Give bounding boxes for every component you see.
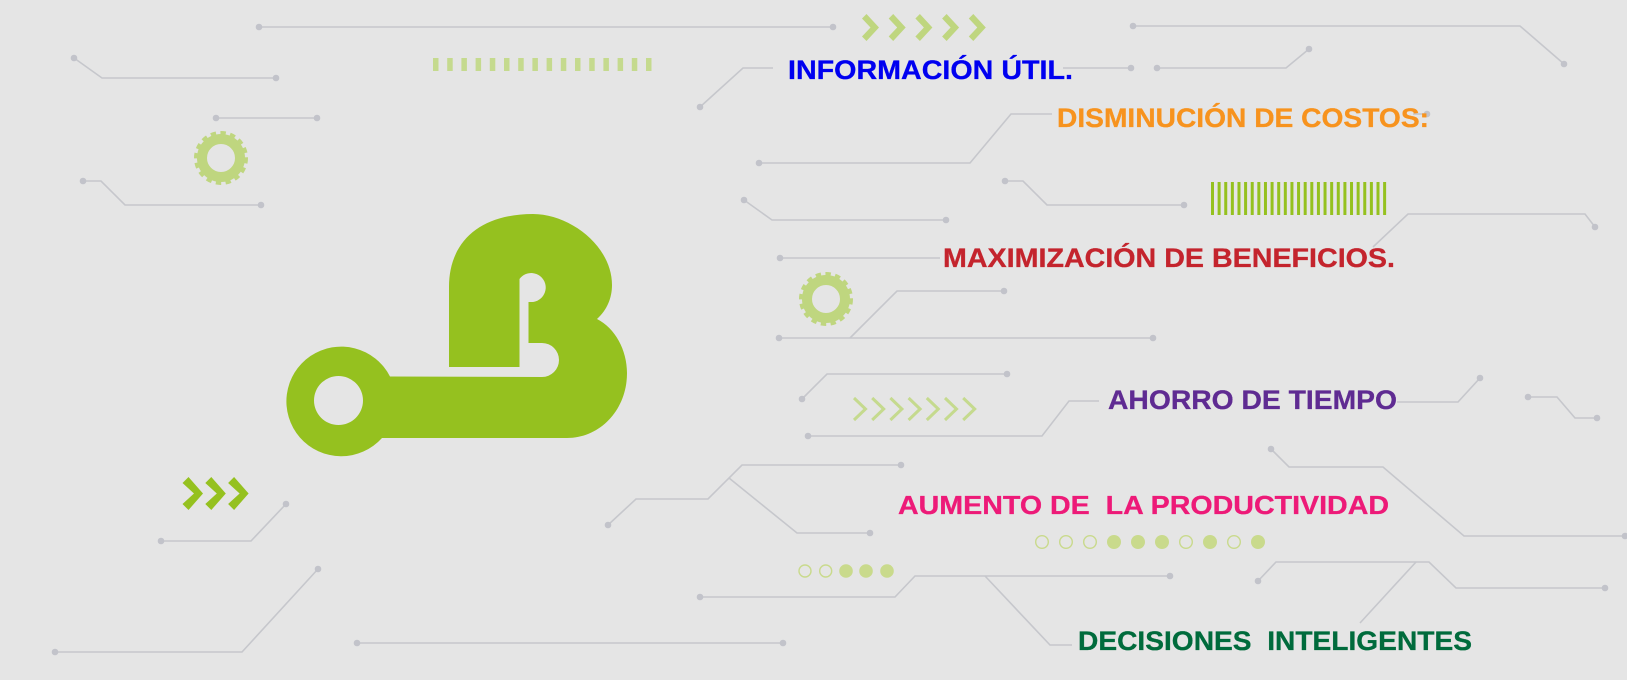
icon: gear left [196, 133, 246, 183]
dot row under productivity [1036, 535, 1265, 549]
logo: green B with ring [286, 214, 627, 456]
heading: ahorro de tiempo: AHORRO DE TIEMPO [1108, 385, 1397, 415]
tick strip [433, 58, 652, 71]
heading: decisiones inteligentes: DECISIONES INTELIGENTES [1078, 626, 1472, 656]
icon: five chevrons top [862, 14, 986, 41]
icon: gear center [801, 274, 851, 324]
heading: maximización de beneficios: MAXIMIZACIÓN DE BENEFICIOS. [943, 242, 1395, 273]
icon: seven thin chevrons [854, 398, 975, 420]
green vertical bars [1211, 182, 1386, 215]
dot row small [799, 564, 894, 578]
icon: three bold chevrons [182, 477, 249, 510]
heading: disminución de costos: DISMINUCIÓN DE COSTOS: [1057, 102, 1429, 133]
heading: información útil: INFORMACIÓN ÚTIL. [788, 54, 1073, 85]
heading: aumento de la productividad: AUMENTO DE LA PRODUCTIVIDAD [898, 490, 1389, 520]
